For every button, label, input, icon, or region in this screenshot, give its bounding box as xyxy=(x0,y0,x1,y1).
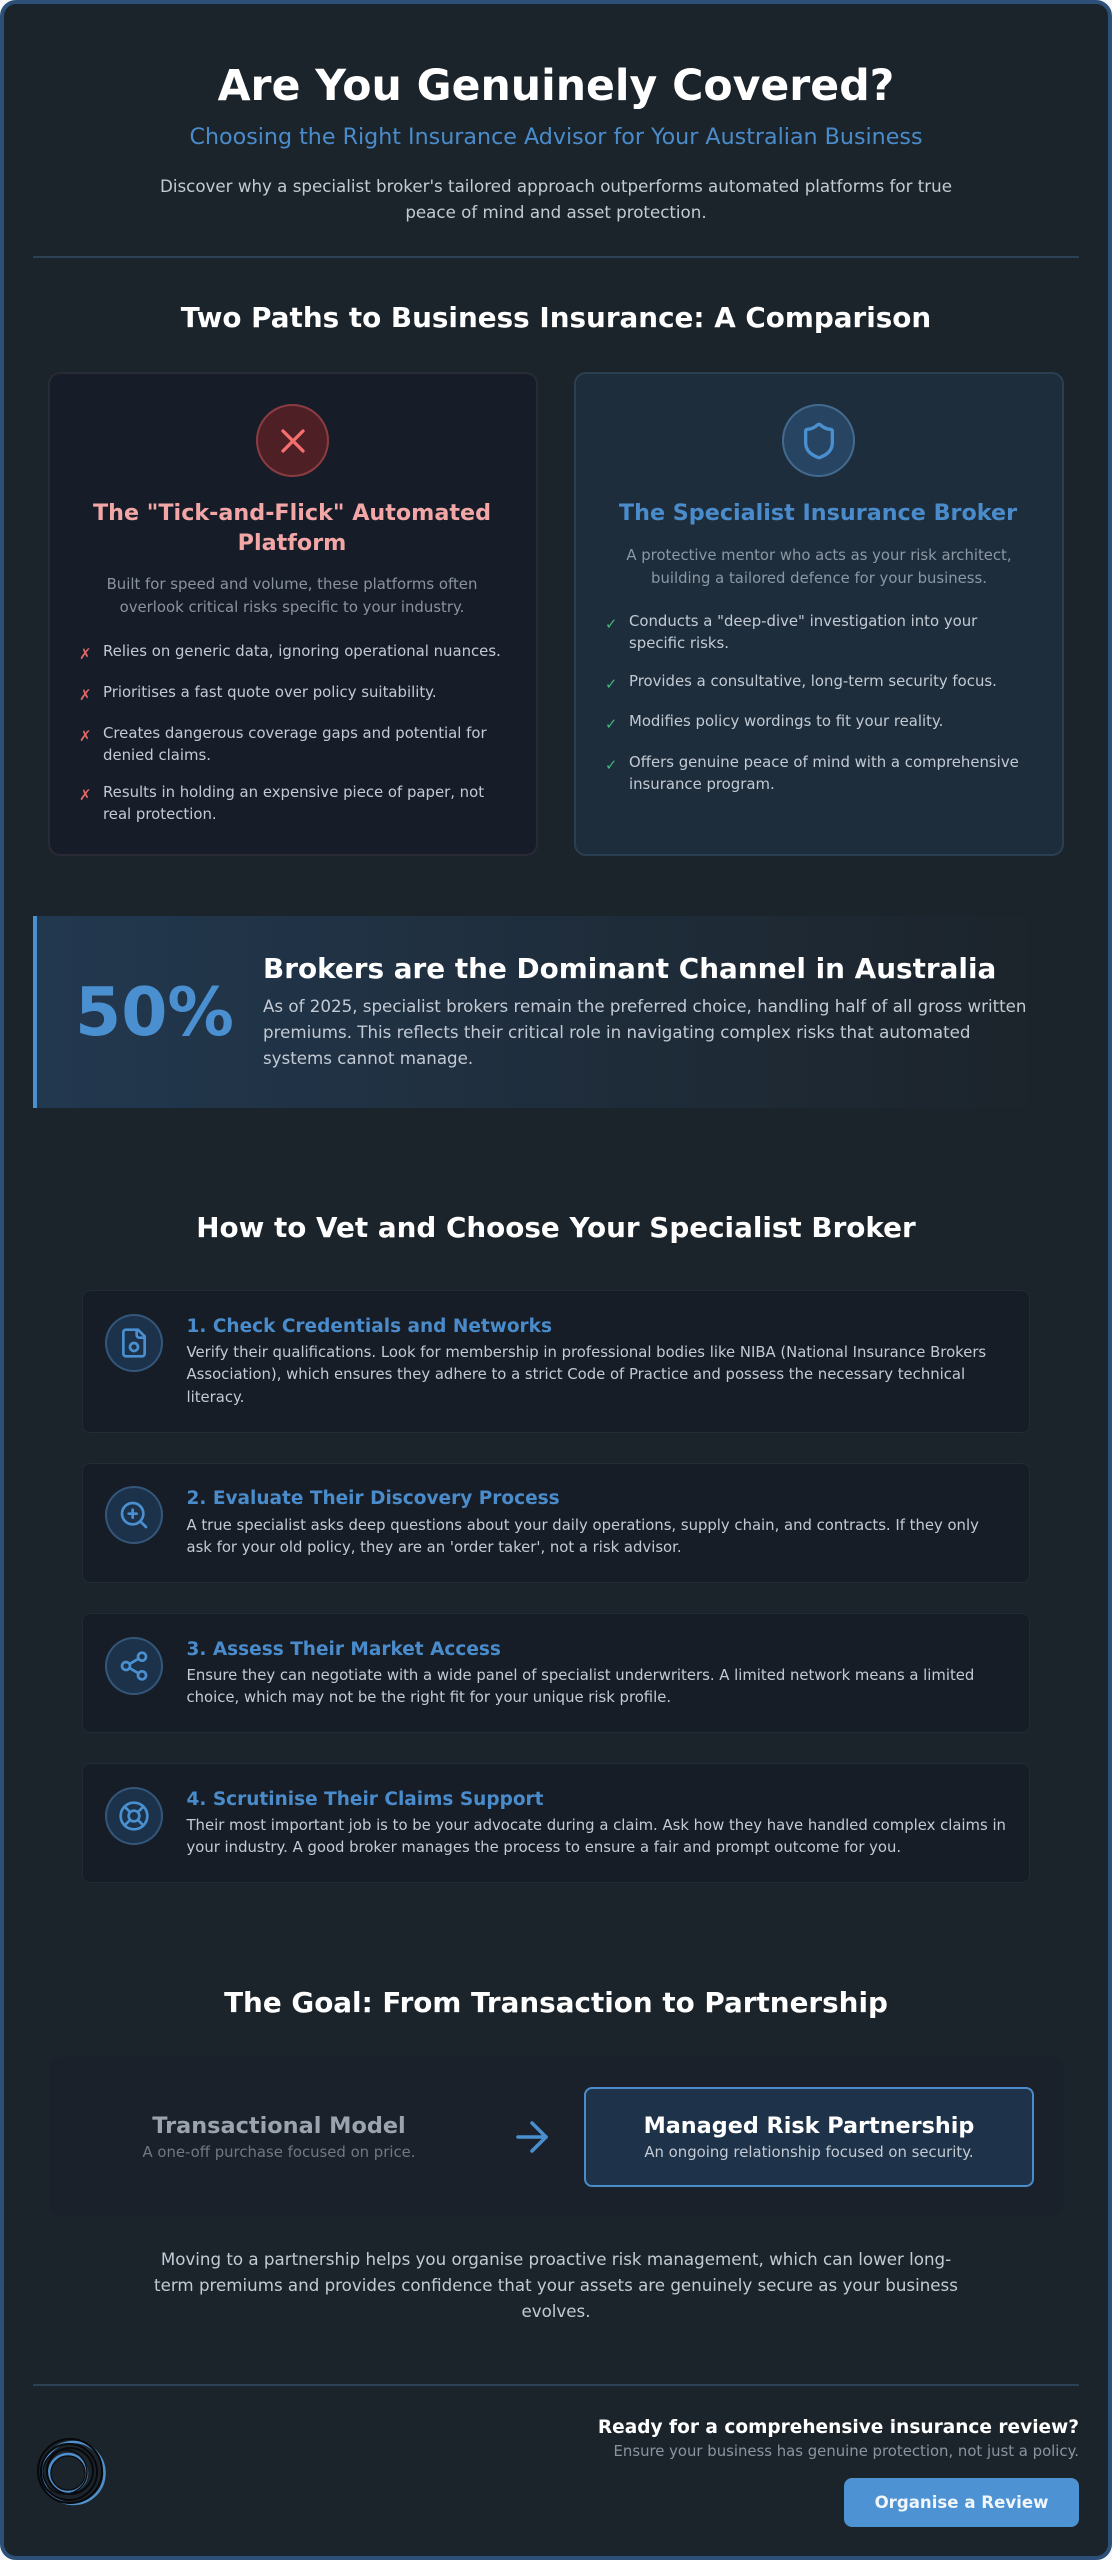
footer divider xyxy=(33,2384,1079,2386)
stat text: As of 2025, specialist brokers remain the preferred choice, handling half of all gross written xyxy=(263,997,1026,1016)
step text: Ensure they can negotiate with a wide panel of specialist underwriters. A limited network means a limited choice, which may not be the right fit for your unique risk profile. xyxy=(186,1667,974,1706)
closing paragraph: Moving to a partnership helps you organise proactive risk management, which can lower long- xyxy=(161,2250,951,2269)
step 1 xyxy=(82,1290,1030,1433)
list item: ✗ xyxy=(79,686,91,704)
panel description xyxy=(107,575,477,616)
panel description: Built for speed and volume, these platforms often xyxy=(107,575,477,593)
panel title: Platform xyxy=(238,530,346,556)
list item: ✗ xyxy=(79,727,91,745)
stat text xyxy=(263,997,1026,1068)
panel description xyxy=(626,547,1012,587)
partnership box xyxy=(584,2087,1034,2187)
button xyxy=(844,2478,1079,2527)
heading: vetting: How to Vet and Choose Your Specialist Broker xyxy=(196,1211,916,1244)
list item: Relies on generic data, ignoring operational nuances. xyxy=(103,642,501,660)
step 4 xyxy=(82,1763,1030,1883)
header divider xyxy=(33,256,1079,258)
list item: Creates dangerous coverage gaps and potential for denied claims. xyxy=(103,724,487,764)
panel description: building a tailored defence for your business. xyxy=(651,570,987,587)
closing paragraph: evolves. xyxy=(521,2302,591,2321)
list item: Modifies policy wordings to fit your reality. xyxy=(629,712,943,730)
panel description: A protective mentor who acts as your risk architect, xyxy=(626,547,1012,564)
call to action text xyxy=(598,2417,1079,2460)
list item: Conducts a "deep-dive" investigation into your specific risks. xyxy=(629,612,977,652)
heading: comparison: Two Paths to Business Insurance: A Comparison xyxy=(181,301,931,334)
intro text xyxy=(160,177,952,222)
partnership title: Managed Risk Partnership xyxy=(644,2113,974,2139)
panel title: The "Tick-and-Flick" Automated xyxy=(93,500,491,526)
list item: Prioritises a fast quote over policy suitability. xyxy=(103,683,437,701)
list item: ✗ xyxy=(79,645,91,663)
step title: 1. Check Credentials and Networks xyxy=(186,1316,552,1337)
intro text: peace of mind and asset protection. xyxy=(405,203,707,222)
heading: goal: The Goal: From Transaction to Partnership xyxy=(224,1986,888,2019)
arrow xyxy=(516,2121,548,2153)
logo xyxy=(37,2438,106,2506)
step text: Their most important job is to be your advocate during a claim. Ask how they have handled complex claims in your industry. A good broker manages the process to ensure a fair and prompt outcome for you. xyxy=(186,1817,1006,1856)
panel description: overlook critical risks specific to your industry. xyxy=(120,598,464,616)
icon: life buoy xyxy=(105,1787,163,1845)
stat heading: Brokers are the Dominant Channel in Australia xyxy=(263,952,996,985)
step title: 4. Scrutinise Their Claims Support xyxy=(186,1789,544,1810)
step title: 2. Evaluate Their Discovery Process xyxy=(186,1488,560,1509)
intro text: Discover why a specialist broker's tailored approach outperforms automated platforms for true xyxy=(160,177,952,196)
partnership subtitle: An ongoing relationship focused on security. xyxy=(644,2143,974,2161)
list item: ✓ xyxy=(605,615,617,633)
model subtitle: A one-off purchase focused on price. xyxy=(142,2143,416,2161)
subtitle: Choosing the Right Insurance Advisor for Your Australian Business xyxy=(189,124,923,150)
icon: shield xyxy=(782,404,855,477)
transactional model xyxy=(142,2113,416,2161)
closing paragraph xyxy=(154,2250,958,2321)
icon: file xyxy=(105,1314,163,1372)
button: Organise a Review xyxy=(875,2493,1048,2512)
step 3 xyxy=(82,1613,1030,1733)
list item: ✓ xyxy=(605,715,617,733)
stat banner xyxy=(33,916,1079,1108)
step text: Verify their qualifications. Look for membership in professional bodies like NIBA (National Insurance Brokers Association), which ensures they adhere to a strict Code of Practice and possess the necessary technical literacy. xyxy=(186,1344,986,1406)
stat text: systems cannot manage. xyxy=(263,1049,473,1068)
panel: transition xyxy=(49,2057,1064,2217)
list item: Offers genuine peace of mind with a comprehensive insurance program. xyxy=(629,753,1019,793)
list item: Provides a consultative, long-term security focus. xyxy=(629,672,997,690)
title: Are You Genuinely Covered? xyxy=(218,61,894,111)
panel title xyxy=(93,500,491,556)
step text: A true specialist asks deep questions about your daily operations, supply chain, and contracts. If they only ask for your old policy, they are an 'order taker', not a risk advisor. xyxy=(186,1517,979,1556)
step title: 3. Assess Their Market Access xyxy=(186,1639,501,1660)
stat text: premiums. This reflects their critical role in navigating complex risks that automated xyxy=(263,1023,970,1042)
list item: ✓ xyxy=(605,675,617,693)
icon: network xyxy=(105,1637,163,1695)
closing paragraph: term premiums and provides confidence that your assets are genuinely secure as your business xyxy=(154,2276,958,2295)
panel: specialist broker xyxy=(574,372,1064,856)
panel: automated platform xyxy=(48,372,538,856)
icon: magnifier xyxy=(105,1486,163,1544)
step 2 xyxy=(82,1463,1030,1583)
stat number: 50% xyxy=(75,973,234,1051)
cta heading: Ready for a comprehensive insurance review? xyxy=(598,2417,1079,2438)
panel title: The Specialist Insurance Broker xyxy=(619,500,1017,526)
list item: Results in holding an expensive piece of paper, not real protection. xyxy=(103,783,484,823)
list item: ✓ xyxy=(605,756,617,774)
cta subtext: Ensure your business has genuine protection, not just a policy. xyxy=(614,2442,1079,2460)
list item: ✗ xyxy=(79,786,91,804)
model title: Transactional Model xyxy=(152,2113,406,2139)
icon: cross xyxy=(256,404,329,477)
